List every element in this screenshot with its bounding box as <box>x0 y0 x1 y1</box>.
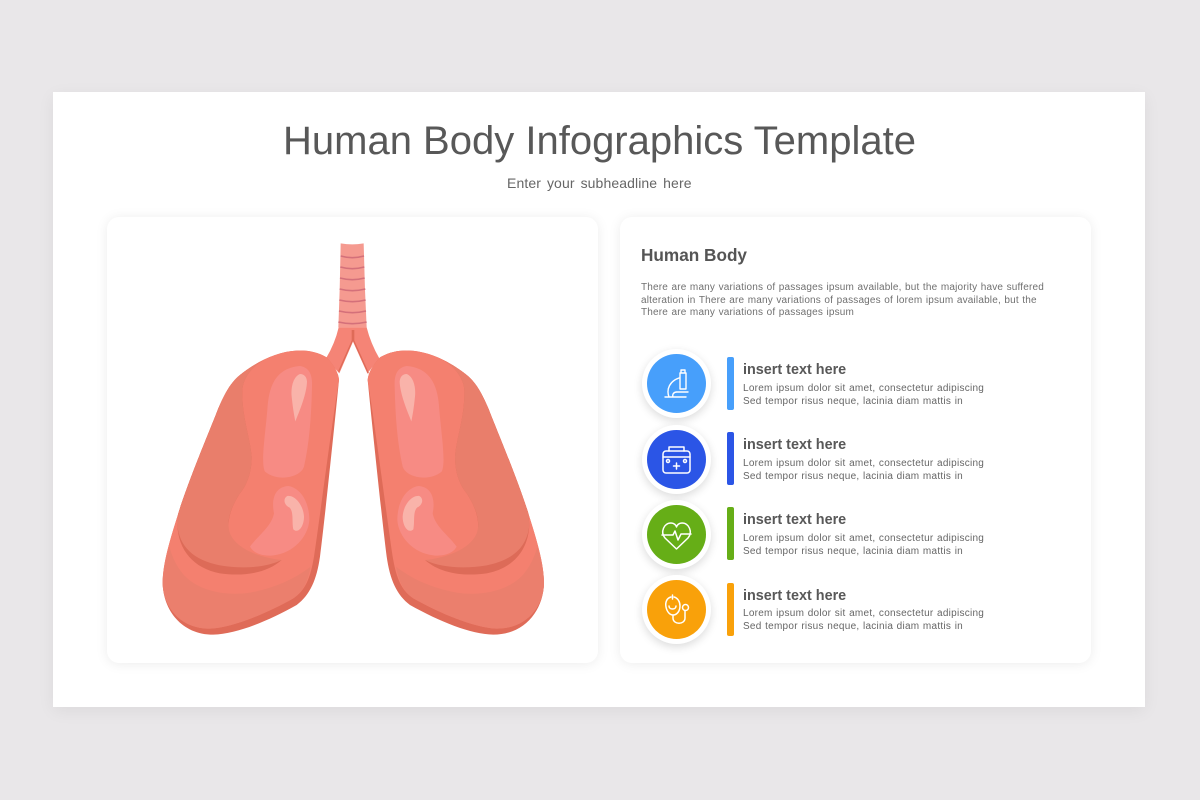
lungs illustration <box>162 243 544 635</box>
item 2 accent bar <box>727 432 734 485</box>
item 4 accent bar <box>727 583 734 636</box>
item 1 heading: insert text here <box>743 362 846 378</box>
slide background <box>53 92 1145 707</box>
item 4 text: Lorem ipsum dolor sit amet, consectetur adipiscing <box>743 608 984 619</box>
item 4 text: Sed tempor risus neque, lacinia diam mattis in <box>743 620 963 632</box>
left lung <box>163 351 339 635</box>
item 2 icon: medical case <box>642 425 711 494</box>
subtitle: Enter your subheadline here <box>507 175 692 191</box>
item 2 text: Lorem ipsum dolor sit amet, consectetur adipiscing <box>743 458 984 469</box>
panel: human body text <box>620 217 1091 663</box>
item 1 accent bar <box>727 357 734 410</box>
item 3 text <box>743 533 984 556</box>
right lung <box>368 351 544 635</box>
panel paragraph: There are many variations of passages ipsum available, but the majority have suffered <box>641 282 1044 293</box>
item 2 text <box>743 458 984 482</box>
item 1 text: Sed tempor risus neque, lacinia diam mattis in <box>743 396 963 406</box>
trachea <box>326 243 379 373</box>
panel heading: Human Body <box>641 245 747 265</box>
item 1 icon: microscope <box>642 349 711 418</box>
item 2 heading: insert text here <box>743 437 846 453</box>
panel paragraph: There are many variations of passages ipsum <box>641 307 854 318</box>
item 3 text: Sed tempor risus neque, lacinia diam mattis in <box>743 546 963 556</box>
title: Human Body Infographics Template <box>283 119 916 163</box>
item 1 text: Lorem ipsum dolor sit amet, consectetur adipiscing <box>743 383 984 394</box>
item 4 heading: insert text here <box>743 588 846 604</box>
item 1 text <box>743 383 984 406</box>
item 4 text <box>743 608 984 632</box>
item 4 icon: stethoscope <box>642 575 711 644</box>
panel paragraph: alteration in There are many variations of passages of lorem ipsum available, but the <box>641 294 1037 306</box>
panel: lungs <box>107 217 598 663</box>
item 2 text: Sed tempor risus neque, lacinia diam mattis in <box>743 470 963 482</box>
item 3 heading: insert text here <box>743 512 846 528</box>
panel paragraph <box>641 282 1044 318</box>
item 3 text: Lorem ipsum dolor sit amet, consectetur adipiscing <box>743 533 984 544</box>
item 3 accent bar <box>727 507 734 560</box>
item 3 icon: heart pulse <box>642 500 711 569</box>
